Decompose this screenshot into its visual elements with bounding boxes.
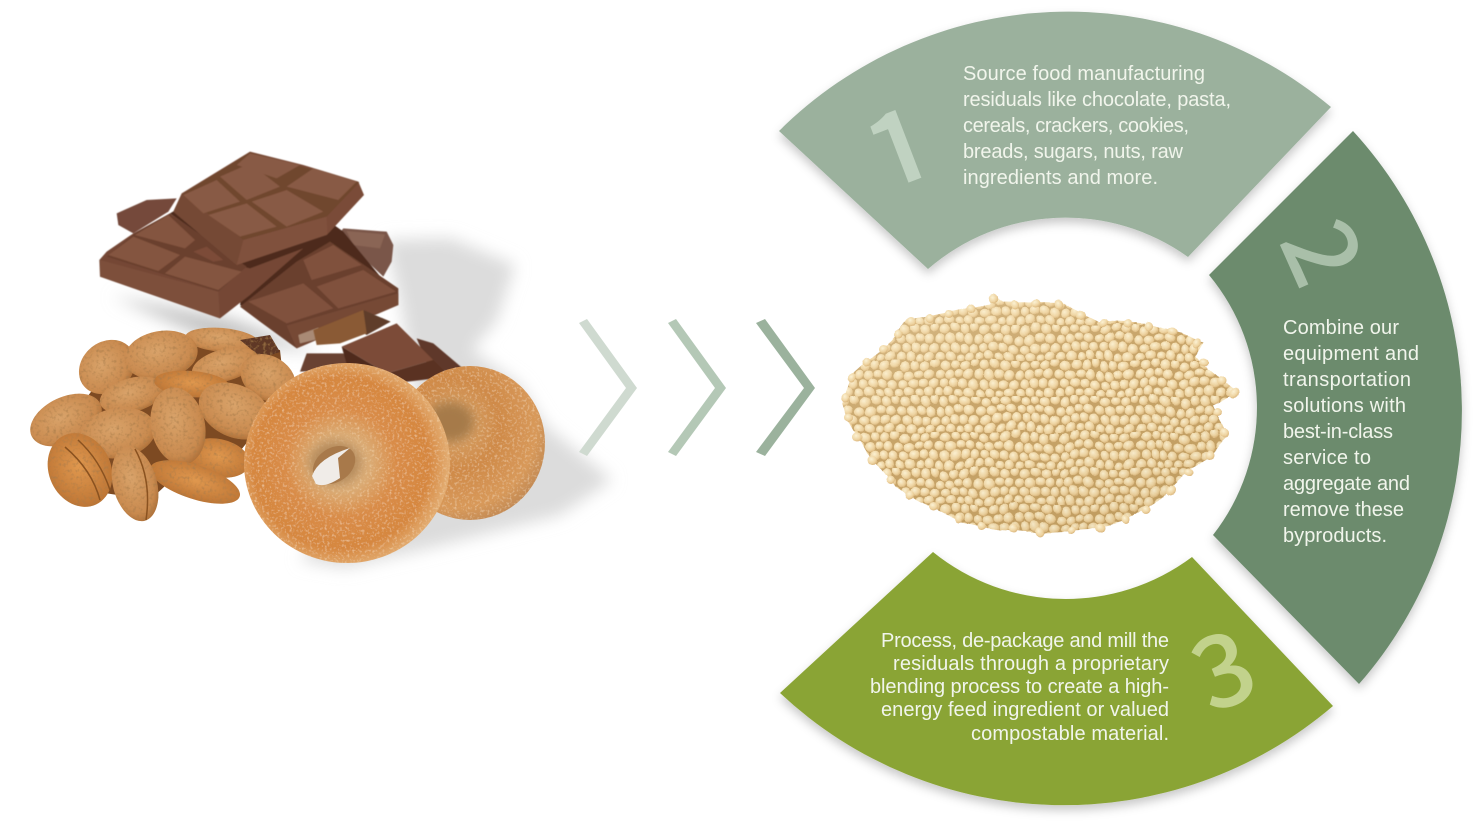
chocolate: small pieces — [300, 310, 467, 383]
text: step 2 description: best-in-class — [1283, 421, 1393, 443]
text: step 2 description — [1283, 317, 1419, 547]
text: step 3 description: residuals through a proprietary — [893, 653, 1169, 675]
text: step 2 description: Combine our — [1283, 317, 1399, 339]
image: chocolate bars — [99, 152, 467, 383]
text: step 3 description: blending process to create a high- — [870, 676, 1169, 698]
text: step 1 description — [963, 63, 1231, 189]
image: grain pile — [842, 294, 1238, 536]
chocolate: lower right bar — [240, 242, 398, 348]
chocolate group in zoom coordinates — [99, 152, 398, 348]
text: step 1 description: cereals, crackers, cookies, — [963, 115, 1189, 137]
number 1: 1 — [837, 52, 961, 236]
panel: step 3 — [780, 552, 1333, 805]
text: step 2 description: solutions with — [1283, 395, 1406, 417]
arrow: chevron 2 — [668, 319, 726, 456]
chocolate: left bar — [99, 213, 303, 318]
text: step 2 description: remove these — [1283, 499, 1404, 521]
text: step 3 description: compostable material. — [971, 723, 1169, 745]
image: back bagel — [395, 366, 545, 520]
panel: step 2 — [1209, 131, 1462, 684]
arrow: chevron 1 — [579, 319, 637, 456]
text: step 1 description: breads, sugars, nuts, raw — [963, 141, 1184, 163]
text: step 2 description: byproducts. — [1283, 525, 1387, 547]
text: step 2 description: equipment and — [1283, 343, 1419, 365]
chocolate: top bar — [173, 152, 364, 265]
panel: step 1 — [779, 12, 1331, 269]
text: step 2 description: transportation — [1283, 369, 1411, 391]
text: step 2 description: service to — [1283, 447, 1371, 469]
bagel hole — [305, 438, 363, 492]
text: step 1 description: ingredients and more. — [963, 167, 1158, 189]
image: almonds — [22, 325, 304, 526]
text: step 3 description: energy feed ingredient or valued — [881, 699, 1169, 721]
arrow: chevron 3 — [756, 319, 815, 456]
text: step 3 description — [870, 630, 1169, 745]
image: front bagel — [244, 363, 450, 563]
number 2: 2 — [1252, 194, 1407, 305]
cast shadow of food group — [112, 238, 612, 568]
text: step 1 description: residuals like chocolate, pasta, — [963, 89, 1231, 111]
text: step 3 description: Process, de-package and mill the — [881, 630, 1169, 652]
text: step 1 description: Source food manufacturing — [963, 63, 1205, 85]
text: step 2 description: aggregate and — [1283, 473, 1410, 495]
number 3: 3 — [1167, 585, 1274, 741]
